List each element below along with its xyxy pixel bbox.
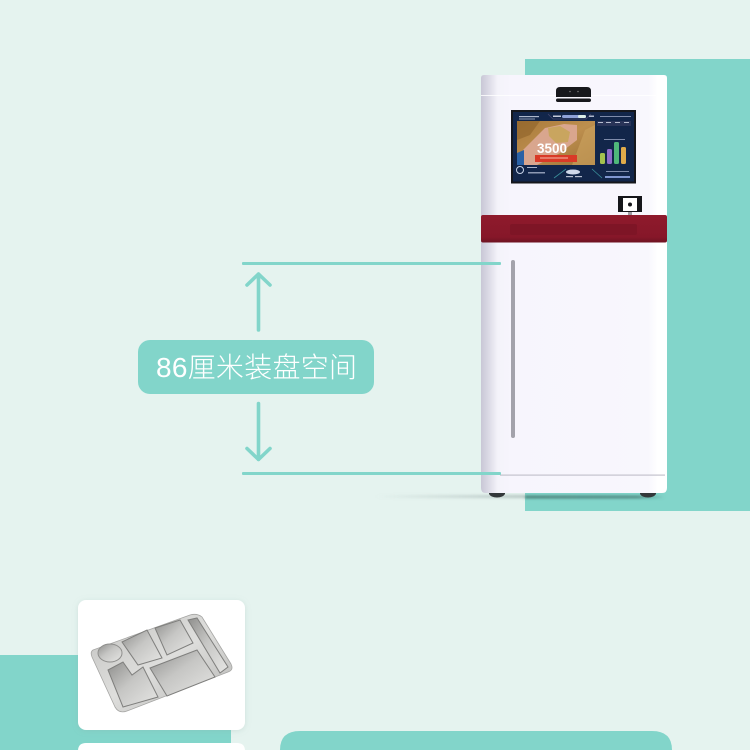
machine floor shadow — [375, 495, 665, 498]
dimension line: bottom — [242, 472, 501, 475]
label pill: tray space — [138, 340, 374, 394]
QR scanner — [618, 196, 642, 215]
arrow: down — [247, 404, 270, 460]
screen figure: 3500 — [537, 140, 567, 156]
cabinet feet — [489, 492, 656, 498]
dimension line: top — [242, 262, 501, 265]
screen footer — [516, 166, 630, 178]
screen side stats — [597, 121, 631, 140]
arrow: up — [247, 274, 270, 330]
card: second tray (cropped) — [78, 743, 245, 750]
machine: tray cabinet — [481, 75, 667, 498]
bottom teal pill (cropped) — [280, 731, 672, 750]
screen header — [519, 114, 631, 120]
teal backdrop panel: bottom left — [0, 655, 231, 750]
screen red banner — [535, 155, 577, 162]
red band — [481, 215, 667, 242]
camera — [556, 87, 591, 102]
teal backdrop panel: right — [525, 59, 750, 511]
card: steel tray — [78, 600, 245, 730]
screen bar chart — [600, 142, 626, 164]
touch screen — [511, 110, 636, 184]
door bottom seam — [500, 474, 665, 476]
label text: 86厘米装盘空间 — [156, 352, 357, 383]
door handle — [511, 260, 515, 438]
lid seam — [481, 95, 656, 96]
icon: steel tray — [91, 614, 232, 712]
cabinet body — [481, 75, 667, 493]
screen photo: grain in hands — [517, 121, 595, 165]
